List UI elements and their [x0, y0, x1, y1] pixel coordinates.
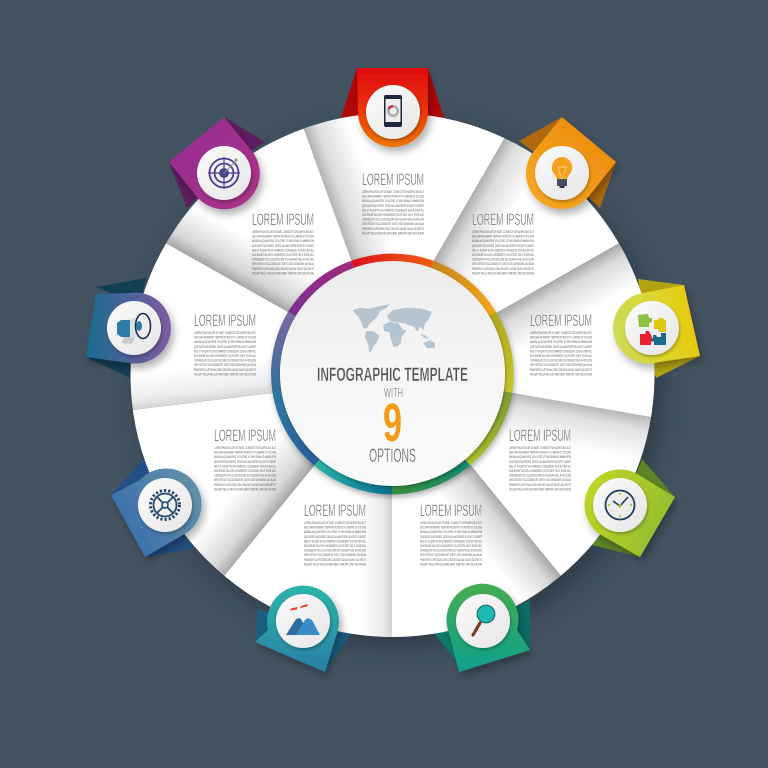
badge: phone	[357, 68, 428, 147]
text block: lower right: LOREM IPSUM DOLOR SIT AMET CONSECTETUR ADIPISCING ELIT	[509, 446, 571, 450]
text block: lower left: EUM IRIURE DOLOR IN HENDRERIT VULPUTATE VELIT ESSE MOL	[214, 469, 276, 473]
center disc	[280, 261, 505, 486]
text block: top: SED DIAM NONUMMY TEMPOR INCIDUNT UT LABORE ET DOLORE	[362, 195, 424, 199]
segment 6	[224, 460, 392, 637]
icon: gear	[150, 490, 180, 520]
text block: lower left: VERO EROS ET ACCUMSAN ET IUSTO ODIO DIGNISSIM QUI BLAN	[214, 478, 276, 482]
text block: right: QUIS NOSTRUD EXERCI TATION ULLAMCORPER SUSCIPIT LOBORT	[530, 345, 592, 349]
text block: lower left: NISL UT ALIQUIP EX EA COMMODO CONSEQUAT DUIS AUTEM VEL	[214, 464, 276, 468]
badge: light bulb	[526, 117, 616, 209]
text block: left: LOREM IPSUM DOLOR SIT AMET CONSECTETUR ADIPISCING ELIT	[194, 331, 256, 335]
icon: target	[208, 157, 240, 189]
text block: lower right: EUM IRIURE DOLOR IN HENDRERIT VULPUTATE VELIT ESSE MOL	[509, 469, 571, 473]
text block: right: CONSEQUAT VEL ILLUM DOLORE EU FEUGIAT NULLA FACILISIS	[530, 359, 592, 363]
text block: left: LOREM IPSUM	[194, 311, 256, 330]
text block: top: MAGNA ALIQUAM ERAT VOLUTPAT UT WISI ENIM AD MINIM VENI	[362, 199, 424, 203]
text block: top right: NISL UT ALIQUIP EX EA COMMODO CONSEQUAT DUIS AUTEM VEL	[472, 248, 534, 252]
text block: right: LOREM IPSUM DOLOR SIT AMET CONSECTETUR ADIPISCING ELIT	[530, 331, 592, 335]
text block: top left: LOREM IPSUM	[252, 210, 314, 229]
text block: top: VERO EROS ET ACCUMSAN ET IUSTO ODIO DIGNISSIM QUI BLAN	[362, 222, 424, 226]
text block: top: QUIS NOSTRUD EXERCI TATION ULLAMCORPER SUSCIPIT LOBORT	[362, 204, 424, 208]
badge: gear	[111, 469, 202, 557]
text block: lower right: PRAESENT LUPTATUM ZZRIL DELENIT AUGUE DUIS DOLORE TE	[509, 483, 571, 487]
text block: top: LOREM IPSUM	[362, 170, 424, 189]
text block: lower left: CONSEQUAT VEL ILLUM DOLORE EU FEUGIAT NULLA FACILISIS	[214, 474, 276, 478]
text block: lower right: SED DIAM NONUMMY TEMPOR INCIDUNT UT LABORE ET DOLORE	[509, 451, 571, 455]
number 9: 9	[383, 393, 402, 453]
segment 9	[166, 128, 354, 316]
text block: right: MAGNA ALIQUAM ERAT VOLUTPAT UT WISI ENIM AD MINIM VENI	[530, 340, 592, 344]
icon: megaphone	[117, 314, 150, 344]
text block: bottom left: MAGNA ALIQUAM ERAT VOLUTPAT UT WISI ENIM AD MINIM VENI	[304, 530, 366, 534]
text block: lower right: QUIS NOSTRUD EXERCI TATION ULLAMCORPER SUSCIPIT LOBORT	[509, 460, 571, 464]
text block: lower left: MAGNA ALIQUAM ERAT VOLUTPAT UT WISI ENIM AD MINIM VENI	[214, 455, 276, 459]
text block: bottom left: CONSEQUAT VEL ILLUM DOLORE EU FEUGIAT NULLA FACILISIS	[304, 549, 366, 553]
text block: top right: PRAESENT LUPTATUM ZZRIL DELENIT AUGUE DUIS DOLORE TE	[472, 267, 534, 271]
text block: left: QUIS NOSTRUD EXERCI TATION ULLAMCORPER SUSCIPIT LOBORT	[194, 345, 256, 349]
text block: top left: NISL UT ALIQUIP EX EA COMMODO CONSEQUAT DUIS AUTEM VEL	[252, 248, 314, 252]
segment 3	[496, 244, 654, 418]
wheel of nine segments	[130, 115, 654, 637]
label: with: WITH	[384, 386, 403, 400]
text block: lower right: LOREM IPSUM	[509, 426, 571, 445]
text block: top right: FEUGAIT NULLA FACILISI NAM LIBER TEMPOR CUM SOLUTA NOB	[472, 271, 534, 275]
text block: left: SED DIAM NONUMMY TEMPOR INCIDUNT UT LABORE ET DOLORE	[194, 336, 256, 340]
text block: top right: LOREM IPSUM	[472, 210, 534, 229]
segment 5	[392, 460, 561, 637]
text block: bottom right: QUIS NOSTRUD EXERCI TATION ULLAMCORPER SUSCIPIT LOBORT	[420, 535, 482, 539]
text block: lower right: FEUGAIT NULLA FACILISI NAM LIBER TEMPOR CUM SOLUTA NOB	[509, 487, 571, 491]
text block: lower left: PRAESENT LUPTATUM ZZRIL DELENIT AUGUE DUIS DOLORE TE	[214, 483, 276, 487]
segment 4	[470, 392, 651, 576]
text block: right: PRAESENT LUPTATUM ZZRIL DELENIT AUGUE DUIS DOLORE TE	[530, 368, 592, 372]
text block: bottom right: MAGNA ALIQUAM ERAT VOLUTPAT UT WISI ENIM AD MINIM VENI	[420, 530, 482, 534]
text block: top: NISL UT ALIQUIP EX EA COMMODO CONSEQUAT DUIS AUTEM VEL	[362, 208, 424, 212]
disk shadow	[138, 123, 662, 647]
text block: lower left: LOREM IPSUM	[214, 426, 276, 445]
icon: clock	[606, 490, 634, 520]
text block: top: PRAESENT LUPTATUM ZZRIL DELENIT AUGUE DUIS DOLORE TE	[362, 227, 424, 231]
segment texts	[194, 170, 592, 566]
text block: top left: QUIS NOSTRUD EXERCI TATION ULLAMCORPER SUSCIPIT LOBORT	[252, 244, 314, 248]
text block: right: SED DIAM NONUMMY TEMPOR INCIDUNT UT LABORE ET DOLORE	[530, 336, 592, 340]
text block: bottom left: QUIS NOSTRUD EXERCI TATION ULLAMCORPER SUSCIPIT LOBORT	[304, 535, 366, 539]
text block: bottom left: LOREM IPSUM	[304, 501, 366, 520]
text block: top right: SED DIAM NONUMMY TEMPOR INCIDUNT UT LABORE ET DOLORE	[472, 235, 534, 239]
text block: right: FEUGAIT NULLA FACILISI NAM LIBER TEMPOR CUM SOLUTA NOB	[530, 372, 592, 376]
text block: left: MAGNA ALIQUAM ERAT VOLUTPAT UT WISI ENIM AD MINIM VENI	[194, 340, 256, 344]
badge: mountains	[255, 586, 339, 672]
text block: right	[530, 311, 592, 376]
text block: lower left: SED DIAM NONUMMY TEMPOR INCIDUNT UT LABORE ET DOLORE	[214, 451, 276, 455]
text block: bottom right: NISL UT ALIQUIP EX EA COMMODO CONSEQUAT DUIS AUTEM VEL	[420, 539, 482, 543]
text block: top: CONSEQUAT VEL ILLUM DOLORE EU FEUGIAT NULLA FACILISIS	[362, 218, 424, 222]
text block: bottom right: EUM IRIURE DOLOR IN HENDRERIT VULPUTATE VELIT ESSE MOL	[420, 544, 482, 548]
text block: top right: VERO EROS ET ACCUMSAN ET IUSTO ODIO DIGNISSIM QUI BLAN	[472, 262, 534, 266]
text block: lower right	[509, 426, 571, 491]
text block: bottom left: FEUGAIT NULLA FACILISI NAM LIBER TEMPOR CUM SOLUTA NOB	[304, 562, 366, 566]
icon: phone	[384, 95, 402, 127]
text block: top: FEUGAIT NULLA FACILISI NAM LIBER TEMPOR CUM SOLUTA NOB	[362, 231, 424, 235]
text block: lower left: FEUGAIT NULLA FACILISI NAM LIBER TEMPOR CUM SOLUTA NOB	[214, 487, 276, 491]
text block: top: LOREM IPSUM DOLOR SIT AMET CONSECTETUR ADIPISCING ELIT	[362, 190, 424, 194]
text block: bottom right: PRAESENT LUPTATUM ZZRIL DELENIT AUGUE DUIS DOLORE TE	[420, 558, 482, 562]
text block: top left: VERO EROS ET ACCUMSAN ET IUSTO ODIO DIGNISSIM QUI BLAN	[252, 262, 314, 266]
text block: bottom right: CONSEQUAT VEL ILLUM DOLORE EU FEUGIAT NULLA FACILISIS	[420, 549, 482, 553]
text block: lower right: CONSEQUAT VEL ILLUM DOLORE EU FEUGIAT NULLA FACILISIS	[509, 474, 571, 478]
text block: top left: LOREM IPSUM DOLOR SIT AMET CONSECTETUR ADIPISCING ELIT	[252, 230, 314, 234]
text block: top right: CONSEQUAT VEL ILLUM DOLORE EU FEUGIAT NULLA FACILISIS	[472, 258, 534, 262]
tab wings behind the wheel	[86, 68, 700, 672]
badge: puzzle	[613, 285, 700, 364]
text block: top left: MAGNA ALIQUAM ERAT VOLUTPAT UT WISI ENIM AD MINIM VENI	[252, 239, 314, 243]
text block: bottom left: PRAESENT LUPTATUM ZZRIL DELENIT AUGUE DUIS DOLORE TE	[304, 558, 366, 562]
text block: bottom right	[420, 501, 482, 566]
text block: left: NISL UT ALIQUIP EX EA COMMODO CONSEQUAT DUIS AUTEM VEL	[194, 349, 256, 353]
text block: bottom right: LOREM IPSUM	[420, 501, 482, 520]
text block: lower left: QUIS NOSTRUD EXERCI TATION ULLAMCORPER SUSCIPIT LOBORT	[214, 460, 276, 464]
text block: top right: MAGNA ALIQUAM ERAT VOLUTPAT UT WISI ENIM AD MINIM VENI	[472, 239, 534, 243]
text block: top right: QUIS NOSTRUD EXERCI TATION ULLAMCORPER SUSCIPIT LOBORT	[472, 244, 534, 248]
segment 2	[431, 138, 619, 316]
text block: bottom left: LOREM IPSUM DOLOR SIT AMET CONSECTETUR ADIPISCING ELIT	[304, 521, 366, 525]
center panel	[276, 258, 509, 490]
text block: bottom left: VERO EROS ET ACCUMSAN ET IUSTO ODIO DIGNISSIM QUI BLAN	[304, 553, 366, 557]
text block: top right: EUM IRIURE DOLOR IN HENDRERIT VULPUTATE VELIT ESSE MOL	[472, 253, 534, 257]
text block: lower left: LOREM IPSUM DOLOR SIT AMET CONSECTETUR ADIPISCING ELIT	[214, 446, 276, 450]
text block: lower left	[214, 426, 276, 491]
text block: lower right: VERO EROS ET ACCUMSAN ET IUSTO ODIO DIGNISSIM QUI BLAN	[509, 478, 571, 482]
text block: right: LOREM IPSUM	[530, 311, 592, 330]
icon: mountains	[286, 604, 320, 635]
icon: bulb	[552, 157, 572, 188]
text block: right: NISL UT ALIQUIP EX EA COMMODO CONSEQUAT DUIS AUTEM VEL	[530, 349, 592, 353]
text block: top left	[252, 210, 314, 275]
badge: megaphone	[86, 293, 171, 364]
heading: INFOGRAPHIC TEMPLATE	[317, 364, 468, 386]
text block: left: VERO EROS ET ACCUMSAN ET IUSTO ODIO DIGNISSIM QUI BLAN	[194, 363, 256, 367]
icon: puzzle pieces	[638, 314, 666, 345]
text block: bottom right: LOREM IPSUM DOLOR SIT AMET CONSECTETUR ADIPISCING ELIT	[420, 521, 482, 525]
segment 1	[304, 115, 504, 266]
text block: right: EUM IRIURE DOLOR IN HENDRERIT VULPUTATE VELIT ESSE MOL	[530, 354, 592, 358]
text block: top left: PRAESENT LUPTATUM ZZRIL DELENIT AUGUE DUIS DOLORE TE	[252, 267, 314, 271]
text block: bottom right: FEUGAIT NULLA FACILISI NAM LIBER TEMPOR CUM SOLUTA NOB	[420, 562, 482, 566]
text block: right: VERO EROS ET ACCUMSAN ET IUSTO ODIO DIGNISSIM QUI BLAN	[530, 363, 592, 367]
text block: top	[362, 170, 424, 235]
text block: lower right: NISL UT ALIQUIP EX EA COMMODO CONSEQUAT DUIS AUTEM VEL	[509, 464, 571, 468]
text block: left: PRAESENT LUPTATUM ZZRIL DELENIT AUGUE DUIS DOLORE TE	[194, 368, 256, 372]
text block: left: EUM IRIURE DOLOR IN HENDRERIT VULPUTATE VELIT ESSE MOL	[194, 354, 256, 358]
segment 8	[130, 243, 296, 410]
badge: target	[169, 117, 260, 209]
text block: top left: SED DIAM NONUMMY TEMPOR INCIDUNT UT LABORE ET DOLORE	[252, 235, 314, 239]
badge: magnifier	[446, 584, 530, 672]
text block: lower right: MAGNA ALIQUAM ERAT VOLUTPAT UT WISI ENIM AD MINIM VENI	[509, 455, 571, 459]
text block: top right: LOREM IPSUM DOLOR SIT AMET CONSECTETUR ADIPISCING ELIT	[472, 230, 534, 234]
multicolour ring	[276, 258, 509, 490]
icon: world map	[353, 304, 435, 352]
text block: left: FEUGAIT NULLA FACILISI NAM LIBER TEMPOR CUM SOLUTA NOB	[194, 372, 256, 376]
text block: bottom right: SED DIAM NONUMMY TEMPOR INCIDUNT UT LABORE ET DOLORE	[420, 526, 482, 530]
icon: magnifier	[473, 605, 495, 635]
label: options: OPTIONS	[369, 446, 416, 467]
text block: top right	[472, 210, 534, 275]
text block: bottom left: SED DIAM NONUMMY TEMPOR INCIDUNT UT LABORE ET DOLORE	[304, 526, 366, 530]
segment 7	[132, 392, 319, 576]
text block: left: CONSEQUAT VEL ILLUM DOLORE EU FEUGIAT NULLA FACILISIS	[194, 359, 256, 363]
text block: bottom left: EUM IRIURE DOLOR IN HENDRERIT VULPUTATE VELIT ESSE MOL	[304, 544, 366, 548]
badge: clock	[584, 469, 675, 557]
text block: top left: FEUGAIT NULLA FACILISI NAM LIBER TEMPOR CUM SOLUTA NOB	[252, 271, 314, 275]
text block: left	[194, 311, 256, 376]
text block: bottom left	[304, 501, 366, 566]
text block: top left: CONSEQUAT VEL ILLUM DOLORE EU FEUGIAT NULLA FACILISIS	[252, 258, 314, 262]
text block: bottom right: VERO EROS ET ACCUMSAN ET IUSTO ODIO DIGNISSIM QUI BLAN	[420, 553, 482, 557]
text block: top: EUM IRIURE DOLOR IN HENDRERIT VULPUTATE VELIT ESSE MOL	[362, 213, 424, 217]
text block: top left: EUM IRIURE DOLOR IN HENDRERIT VULPUTATE VELIT ESSE MOL	[252, 253, 314, 257]
text block: bottom left: NISL UT ALIQUIP EX EA COMMODO CONSEQUAT DUIS AUTEM VEL	[304, 539, 366, 543]
